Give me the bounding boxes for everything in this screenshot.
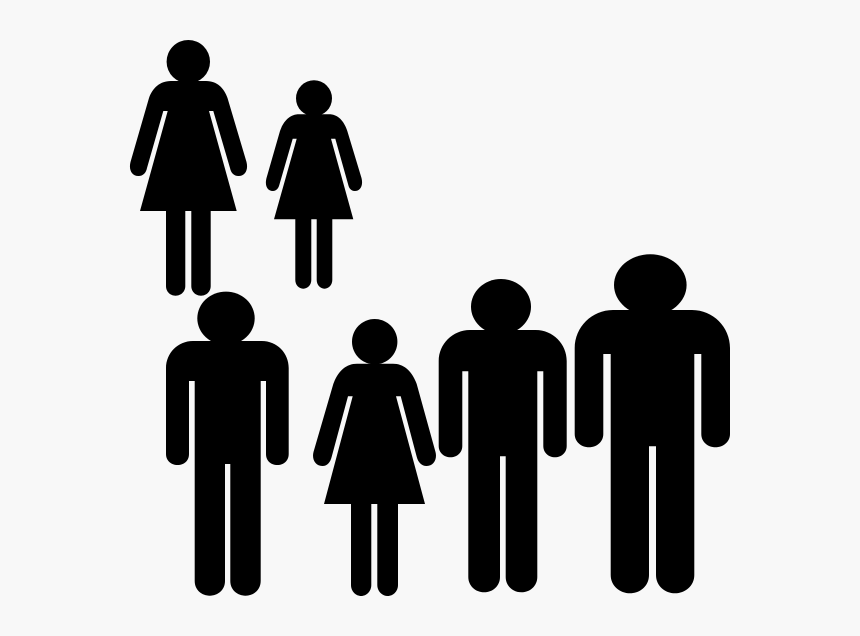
icon: tallest man (575, 254, 730, 593)
icon: man, front left (166, 292, 289, 596)
icon: tall man (439, 279, 567, 592)
icon: small woman, back row (266, 80, 362, 289)
icon: large woman, back row (130, 40, 247, 296)
icon: medium woman, front row (313, 319, 436, 596)
